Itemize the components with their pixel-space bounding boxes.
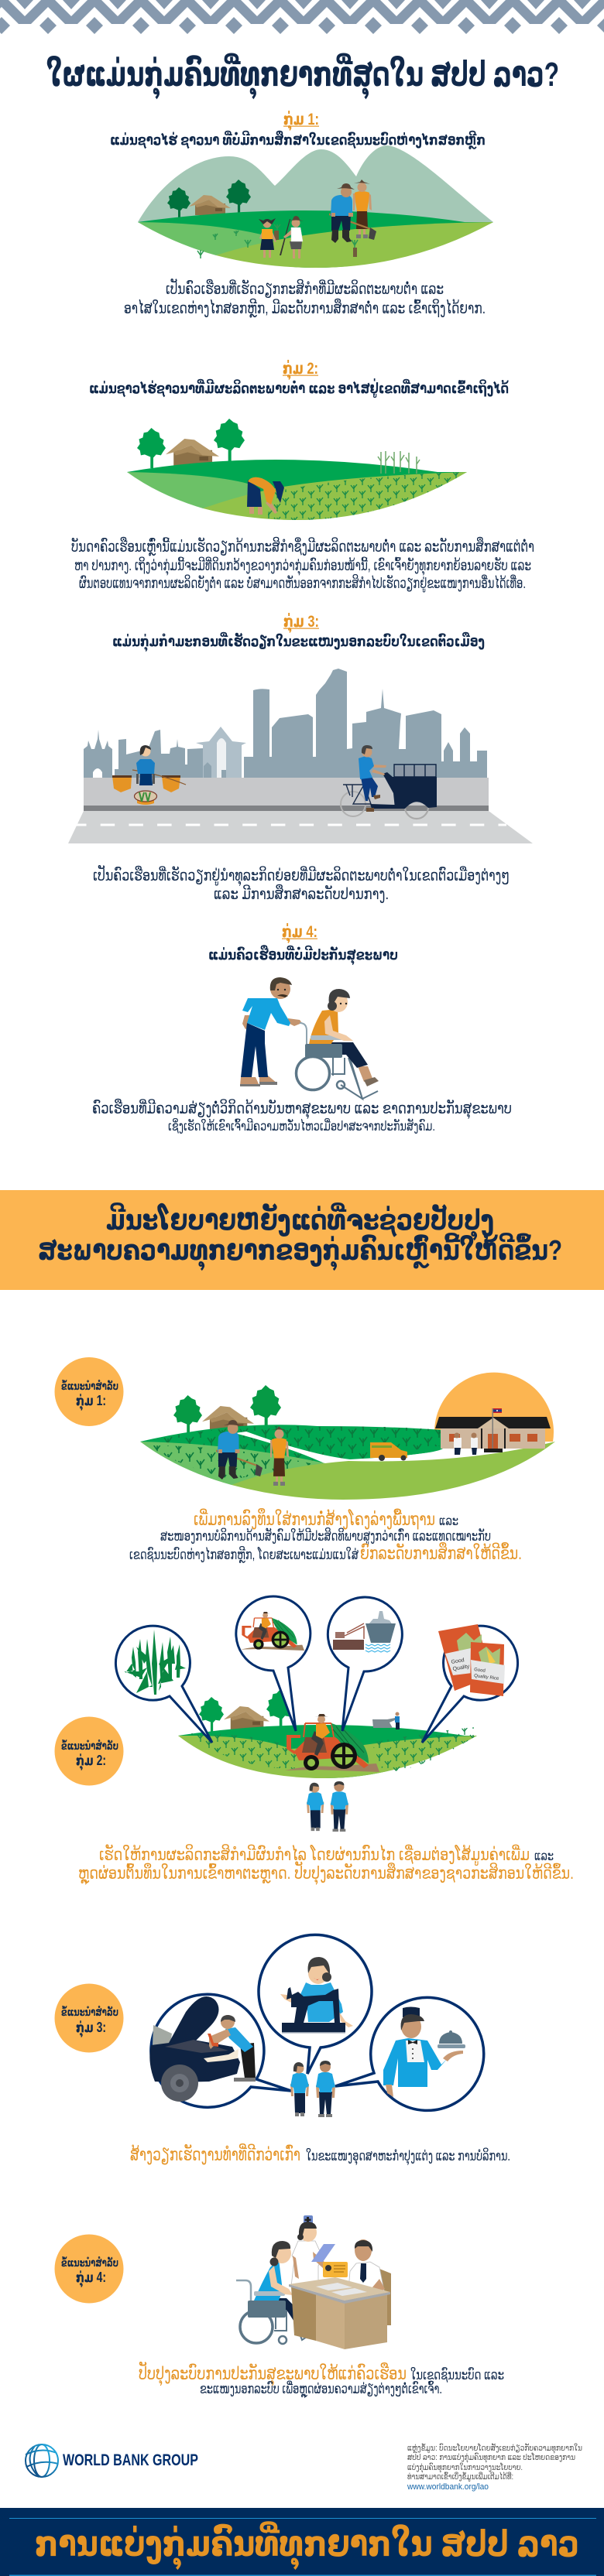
group 4 label: [282, 923, 317, 944]
recommendation 1 text: [129, 1507, 522, 1564]
group 1 subtitle: ແມ່ນຊາວໄຮ່ ຊາວນາ ທີ່ບໍ່ມີການສຶກສາໃນເຂດຊົນນະບົດຫ່າງໄກສອກຫຼີກ: [110, 130, 486, 149]
badge: group 3: ກຸ່ມ 3:: [76, 2020, 106, 2037]
palace building: [196, 727, 246, 778]
panel: recommendation group 1: [54, 1357, 555, 1564]
recommendation 1 text: ແລະ: [439, 1514, 458, 1528]
illustration: man pushing woman in wheelchair: [240, 977, 379, 1099]
road: [68, 811, 533, 843]
source note: www.worldbank.org/lao: [407, 2482, 489, 2492]
recommendation 3 text: ໃນຂະແໜງອຸດສາຫະກໍາປຸງແຕ່ງ ແລະ ການບໍລິການ.: [306, 2148, 510, 2166]
figure: patient in wheelchair: [236, 2241, 316, 2344]
group 3 label: [283, 613, 319, 634]
badge: group 2: [54, 1716, 124, 1786]
callout: rice bags bubble: Quality Rice: [474, 1674, 499, 1681]
callout: rice bags bubble: Good: [451, 1657, 465, 1665]
illustration: clinic visit: [236, 2215, 391, 2349]
group 4 subtitle: ແມ່ນຄົວເຮືອນທີ່ບໍ່ມີປະກັນສຸຂະພາບ: [208, 945, 398, 966]
recommendation 1 text: ສະໜອງການບໍລິການດ້ານສັງຄົມໃຫ້ມີປະສິດທິພາບສູງກວ່າເກົ່າ ແລະແທດເໝາະກັບ: [160, 1527, 491, 1545]
recommendation 4 text: ຂະແໜງນອກລະບົບ ເພື່ອຫຼຸດຜ່ອນຄວາມສ່ຽງຕ່າງໆຕໍ່ເຂົາເຈົ້າ.: [200, 2380, 442, 2399]
footer title band: [0, 2508, 604, 2576]
chair: [379, 2269, 391, 2325]
badge: group 4: ຂໍ້ແນະນໍາສໍາລັບ: [61, 2256, 118, 2269]
illustration: value chain field scene: [115, 1596, 518, 1832]
badge: group 3: [54, 1984, 124, 2052]
group 2 label: ກຸ່ມ 2:: [283, 360, 318, 381]
badge: group 1: ກຸ່ມ 1:: [76, 1393, 106, 1411]
small tiller figure: [372, 1712, 400, 1729]
skyline: [84, 669, 487, 778]
callout: waiter bubble: [335, 1997, 484, 2110]
badge: group 2: ຂໍ້ແນະນໍາສໍາລັບ: [61, 1739, 118, 1752]
school building: [435, 1408, 551, 1452]
figure: boy: [280, 216, 304, 258]
recommendation 1 text: ເຂດຊົນນະບົດຫ່າງໄກສອກຫຼີກ, ໂດຍສະເພາະແມ່ນແນໃສ່: [129, 1546, 359, 1564]
source note: ທ່ານສາມາດເຂົ້າເບິ່ງຂໍ້ມູນເພີ່ມເຕີມໄດ້ທີ່:: [407, 2472, 513, 2482]
callout: rice plant bubble: [115, 1626, 212, 1743]
recommendation 4 text: [139, 2361, 504, 2399]
illustration: rice farmer in field: [127, 419, 467, 520]
group 2 description: [71, 537, 534, 594]
badge: group 4: ກຸ່ມ 4:: [76, 2270, 106, 2287]
wall: [84, 778, 489, 806]
figure: man: [240, 977, 302, 1086]
badge: group 2: ກຸ່ມ 2:: [76, 1753, 106, 1770]
panel: group 4: [92, 923, 512, 1134]
group 1 description: ເປັນຄົວເຮືອນທີ່ເຮັດວຽກກະສິກໍາທີ່ມີຜະລິດຕະພາບຕໍ່າ ແລະ: [166, 279, 444, 298]
panel: group 3: [68, 613, 533, 903]
group 3 subtitle: ແມ່ນກຸ່ມກໍາມະກອນທີ່ເຮັດວຽກໃນຂະແໜງນອກລະບົບໃນເຂດຕົວເມືອງ: [112, 631, 485, 652]
figure: school children: [454, 1433, 478, 1455]
group 4 description: [92, 1099, 512, 1134]
figure: doctor: [323, 2239, 385, 2297]
logo: World Bank Group: [26, 2444, 198, 2477]
badge: group 1: [54, 1357, 124, 1426]
source note: [407, 2443, 582, 2492]
group 4 description: ເຊິ່ງເຮັດໃຫ້ເຂົາເຈົ້າມີຄວາມຫວັ່ນໄຫວເມື່ອປາສະຈາກປະກັນສັງຄົມ.: [168, 1117, 435, 1134]
group 4 description: ຄົວເຮືອນທີ່ມີຄວາມສ່ຽງຕໍ່ວິກິດດ້ານບັນຫາສຸຂະພາບ ແລະ ຂາດການປະກັນສຸຂະພາບ: [92, 1099, 512, 1119]
desk: [289, 2277, 390, 2349]
callout: rice bags bubble: [422, 1624, 518, 1743]
illustration: city street: [68, 669, 533, 843]
group 2 label: [283, 360, 318, 381]
callout: mechanic bubble: [149, 1994, 291, 2107]
recommendation 1 text: ເພີ່ມການລົງທຶນໃສ່ການກໍ່ສ້າງໂຄງລ່າງພື້ນຖານ: [194, 1507, 435, 1529]
badge: group 1: ຂໍ້ແນະນໍາສໍາລັບ: [61, 1379, 118, 1392]
group 3 description: ແລະ ມີການສຶກສາລະດັບປານກາງ.: [214, 884, 389, 903]
group 3 description: [93, 865, 510, 903]
figure: street vendor with baskets: [112, 745, 186, 805]
group 1 description: ອາໄສໃນເຂດຫ່າງໄກສອກຫຼີກ, ມີລະດັບການສຶກສາຕໍ່າ ແລະ ເຂົ້າເຖິງໄດ້ຍາກ.: [124, 299, 486, 318]
orange heading band: ມີນະໂຍບາຍຫຍັງແດ່ທີ່ຈະຊ່ວຍປັບປຸງ: [106, 1202, 494, 1241]
illustration: mountain farm family: [138, 145, 493, 268]
callout: seamstress bubble: [259, 1935, 372, 2074]
group 3 label: ກຸ່ມ 3:: [283, 613, 319, 634]
group 1 label: [283, 111, 319, 132]
source note: ແບ່ງກຸ່ມຄົນທຸກຍາກໃນການວາງນະໂຍບາຍ.: [407, 2462, 523, 2473]
recommendation 4 text: ປັບປຸງລະບົບການປະກັນສຸຂະພາບໃຫ້ແກ່ຄົວເຮືອນ: [139, 2361, 407, 2386]
recommendation 2 text: [78, 1844, 574, 1885]
orange heading band: [0, 1190, 604, 1290]
illustration: village with road and school: [140, 1373, 555, 1500]
figure: cyclist with cart: [341, 745, 437, 819]
group 3 description: ເປັນຄົວເຮືອນທີ່ເຮັດວຽກຢູ່ນໍາທຸລະກິດຍ່ອຍທີ່ມີຜະລິດຕະພາບຕໍ່າໃນເຂດຕົວເມືອງຕ່າງໆ: [93, 865, 510, 886]
figure: bending farmer: [247, 477, 284, 515]
group 1 description: [124, 279, 486, 318]
recommendation 3 text: ສ້າງວຽກເຮັດງານທໍາທີ່ດີກວ່າເກົ່າ: [130, 2143, 300, 2164]
panel: group 2: [71, 360, 534, 594]
recommendation 4 text: ໃນເຂດຊົນນະບົດ ແລະ: [410, 2366, 504, 2383]
recommendation 1 text: ຍົກລະດັບການສຶກສາໃຫ້ດີຂຶ້ນ.: [360, 1541, 522, 1563]
panel: group 1: [110, 111, 493, 318]
figure: girl: [259, 218, 276, 258]
header zigzag pattern band: [0, 0, 604, 34]
figure: nurse: [291, 2215, 335, 2287]
panel: recommendation group 3: [54, 1935, 510, 2166]
group 4 label: ກຸ່ມ 4:: [282, 923, 317, 944]
figure: wheelchair user: [296, 989, 379, 1099]
recommendation 2 text: ແລະ: [534, 1849, 554, 1863]
pickup truck: [370, 1442, 407, 1461]
logo: World Bank Group: WORLD BANK GROUP: [63, 2451, 198, 2469]
panel: recommendation group 2: [54, 1596, 574, 1885]
callout: rice bags bubble: Quality: [452, 1664, 470, 1672]
callout: shipping bubble: [328, 1597, 402, 1731]
callout: planter bubble: [236, 1596, 311, 1731]
recommendation 3 text: [130, 2143, 510, 2166]
panel: recommendation group 4: [54, 2215, 504, 2399]
group 1 label: ກຸ່ມ 1:: [283, 111, 319, 132]
callout: rice bags bubble: Good: [474, 1668, 486, 1674]
badge: group 4: [54, 2235, 124, 2303]
badge: group 3: ຂໍ້ແນະນໍາສໍາລັບ: [61, 2005, 118, 2018]
